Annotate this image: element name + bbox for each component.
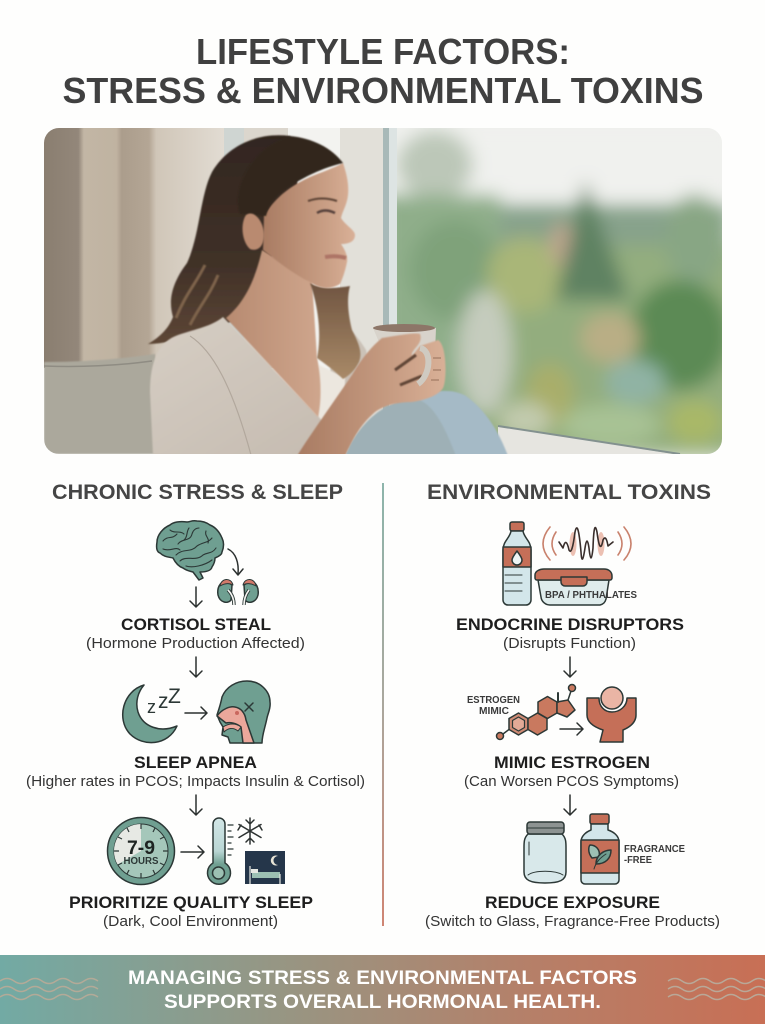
face xyxy=(263,163,355,288)
icon: hormone receptor xyxy=(587,687,636,742)
icon: snowflake xyxy=(238,818,262,844)
tank top xyxy=(318,366,346,420)
sweater xyxy=(150,317,375,456)
label: estrogen mimic xyxy=(467,695,520,717)
icon: signal disruption wave xyxy=(543,527,631,560)
arrow xyxy=(190,795,202,815)
arm and hands xyxy=(297,333,446,456)
icon: plastic water bottle xyxy=(503,522,531,605)
footer banner: SUPPORTS OVERALL HORMONAL HEALTH. xyxy=(164,992,601,1013)
window sill xyxy=(498,427,672,454)
ear xyxy=(243,213,264,250)
label: estrogen mimic: MIMIC xyxy=(479,706,509,717)
icon: head profile with blocked airway xyxy=(217,681,270,743)
icon: kidneys xyxy=(218,579,258,605)
icon: crescent moon with zzz xyxy=(123,685,181,743)
text: can worsen pcos symptoms: (Can Worsen PCOS Symptoms) xyxy=(464,773,679,790)
text: higher rates in pcos: (Higher rates in PCOS; Impacts Insulin & Cortisol) xyxy=(26,773,365,790)
title: LIFESTYLE FACTORS: xyxy=(196,31,570,72)
photo: woman with a mug by the window xyxy=(44,128,740,456)
back of hair xyxy=(148,135,300,344)
section heading: chronic stress and sleep: CHRONIC STRESS & SLEEP xyxy=(52,481,343,504)
title: STRESS & ENVIRONMENTAL TOXINS xyxy=(62,70,704,111)
label: fragrance-free xyxy=(624,844,685,866)
title xyxy=(62,31,704,111)
arrow xyxy=(564,795,576,815)
eye, brow and lips xyxy=(308,198,346,258)
icon: clock 7-9 hours: 7-9 xyxy=(127,838,155,859)
icon: glass jar xyxy=(524,822,566,883)
footer banner: MANAGING STRESS & ENVIRONMENTAL FACTORS xyxy=(128,968,637,989)
mug xyxy=(374,328,436,356)
front hair lengths xyxy=(310,283,360,379)
icon: clock 7-9 hours: HOURS xyxy=(124,855,158,867)
label: fragrance-free: FRAGRANCE xyxy=(624,844,685,855)
icon: crescent moon with zzz: z xyxy=(158,690,168,713)
arrow xyxy=(181,846,204,858)
icon: clock 7-9 hours xyxy=(108,818,174,884)
icon: thermometer xyxy=(208,818,233,884)
footer banner xyxy=(0,955,765,1024)
text: switch to glass: (Switch to Glass, Fragrance-Free Products) xyxy=(425,913,720,930)
icon: fragrance-free bottle xyxy=(581,814,619,884)
sofa xyxy=(44,354,156,454)
icon: crescent moon with zzz: z xyxy=(147,697,156,717)
arrow xyxy=(564,657,576,677)
hair over the head xyxy=(238,136,343,216)
arrow xyxy=(560,723,583,735)
hair highlight strands xyxy=(176,265,218,325)
label: estrogen mimic: ESTROGEN xyxy=(467,695,520,706)
curtain xyxy=(44,128,225,368)
heading: prioritize quality sleep: PRIORITIZE QUALITY SLEEP xyxy=(69,893,313,912)
icon: brain xyxy=(157,521,224,580)
label: bpa and phthalates: BPA / PHTHALATES xyxy=(545,590,637,601)
heading: cortisol steal: CORTISOL STEAL xyxy=(121,615,271,634)
heading: sleep apnea: SLEEP APNEA xyxy=(134,753,257,772)
text: hormone production affected: (Hormone Production Affected) xyxy=(86,635,305,652)
section heading: environmental toxins: ENVIRONMENTAL TOXINS xyxy=(427,481,711,504)
jeans knees xyxy=(412,391,508,456)
heading: reduce exposure: REDUCE EXPOSURE xyxy=(485,893,660,912)
arrow xyxy=(190,657,202,677)
icon: curved arrow from brain to kidneys xyxy=(228,549,243,575)
icon: estrogen molecule xyxy=(496,684,576,740)
neck and chest xyxy=(226,250,321,417)
heading: endocrine disruptors: ENDOCRINE DISRUPTORS xyxy=(456,615,684,634)
text: dark cool environment: (Dark, Cool Environment) xyxy=(103,913,278,930)
label: fragrance-free: -FREE xyxy=(624,855,652,866)
icon: crescent moon with zzz: Z xyxy=(168,685,181,708)
icon: food container xyxy=(535,569,612,605)
arrow xyxy=(185,707,207,719)
text: disrupts function: (Disrupts Function) xyxy=(503,635,636,652)
window view: blurred trees xyxy=(380,128,740,455)
heading: mimic estrogen: MIMIC ESTROGEN xyxy=(494,753,650,772)
arrow xyxy=(190,587,202,607)
icon: dark bedroom xyxy=(245,851,285,884)
window frame xyxy=(224,128,244,340)
column divider xyxy=(382,483,384,926)
